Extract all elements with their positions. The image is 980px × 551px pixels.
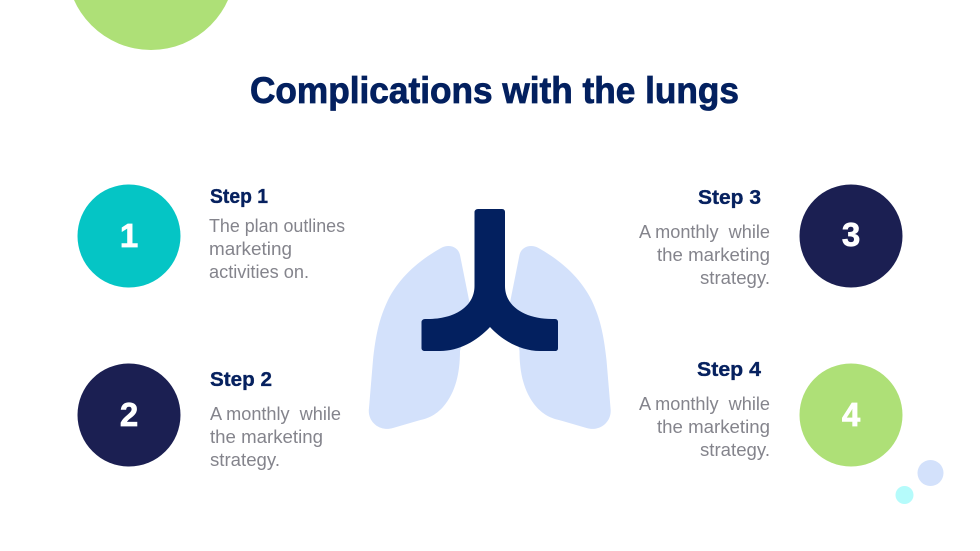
- step 2 text: the marketing: [210, 427, 323, 447]
- decorative green circle top-left: [67, 0, 235, 50]
- step 2 block: [78, 364, 341, 470]
- decorative lavender dot: [918, 460, 944, 486]
- decorative cyan dot: [896, 486, 914, 504]
- step 4 circle: [800, 364, 902, 466]
- step 4 circle: 4: [842, 396, 861, 433]
- left lung: [369, 246, 470, 429]
- step 1 circle: [78, 184, 180, 288]
- step 4 text: A monthly while: [639, 394, 770, 414]
- step 3 circle: 3: [842, 216, 860, 253]
- step 1 block: [78, 184, 345, 288]
- step 4 text: [639, 394, 770, 460]
- step 1 heading: Step 1: [210, 186, 268, 208]
- step 3 text: [639, 222, 770, 288]
- step 2 text: A monthly while: [210, 404, 341, 424]
- title: Complications with the lungs: [250, 70, 739, 111]
- step 3 heading: Step 3: [698, 187, 761, 209]
- step 1 circle: 1: [120, 217, 138, 254]
- step 3 text: the marketing: [657, 245, 770, 265]
- step 1 text: [209, 216, 345, 282]
- step 4 text: the marketing: [657, 417, 770, 437]
- step 4 block: [639, 359, 902, 466]
- step 2 heading: Step 2: [210, 369, 272, 391]
- step 3 circle: [800, 184, 902, 288]
- step 2 text: [210, 404, 341, 470]
- step 4 heading: Step 4: [697, 359, 762, 381]
- step 2 circle: [78, 364, 180, 466]
- step 3 text: strategy.: [700, 268, 770, 288]
- step 3 text: A monthly while: [639, 222, 770, 242]
- step 1 text: marketing: [209, 239, 292, 259]
- icon: lungs: [369, 209, 611, 429]
- step 2 text: strategy.: [210, 450, 280, 470]
- step 4 text: strategy.: [700, 440, 770, 460]
- step 1 text: The plan outlines: [209, 216, 345, 236]
- step 2 circle: 2: [120, 396, 138, 433]
- step 3 block: [639, 184, 902, 288]
- trachea and bronchi: [422, 209, 558, 351]
- right lung: [510, 246, 611, 429]
- step 1 text: activities on.: [209, 262, 309, 282]
